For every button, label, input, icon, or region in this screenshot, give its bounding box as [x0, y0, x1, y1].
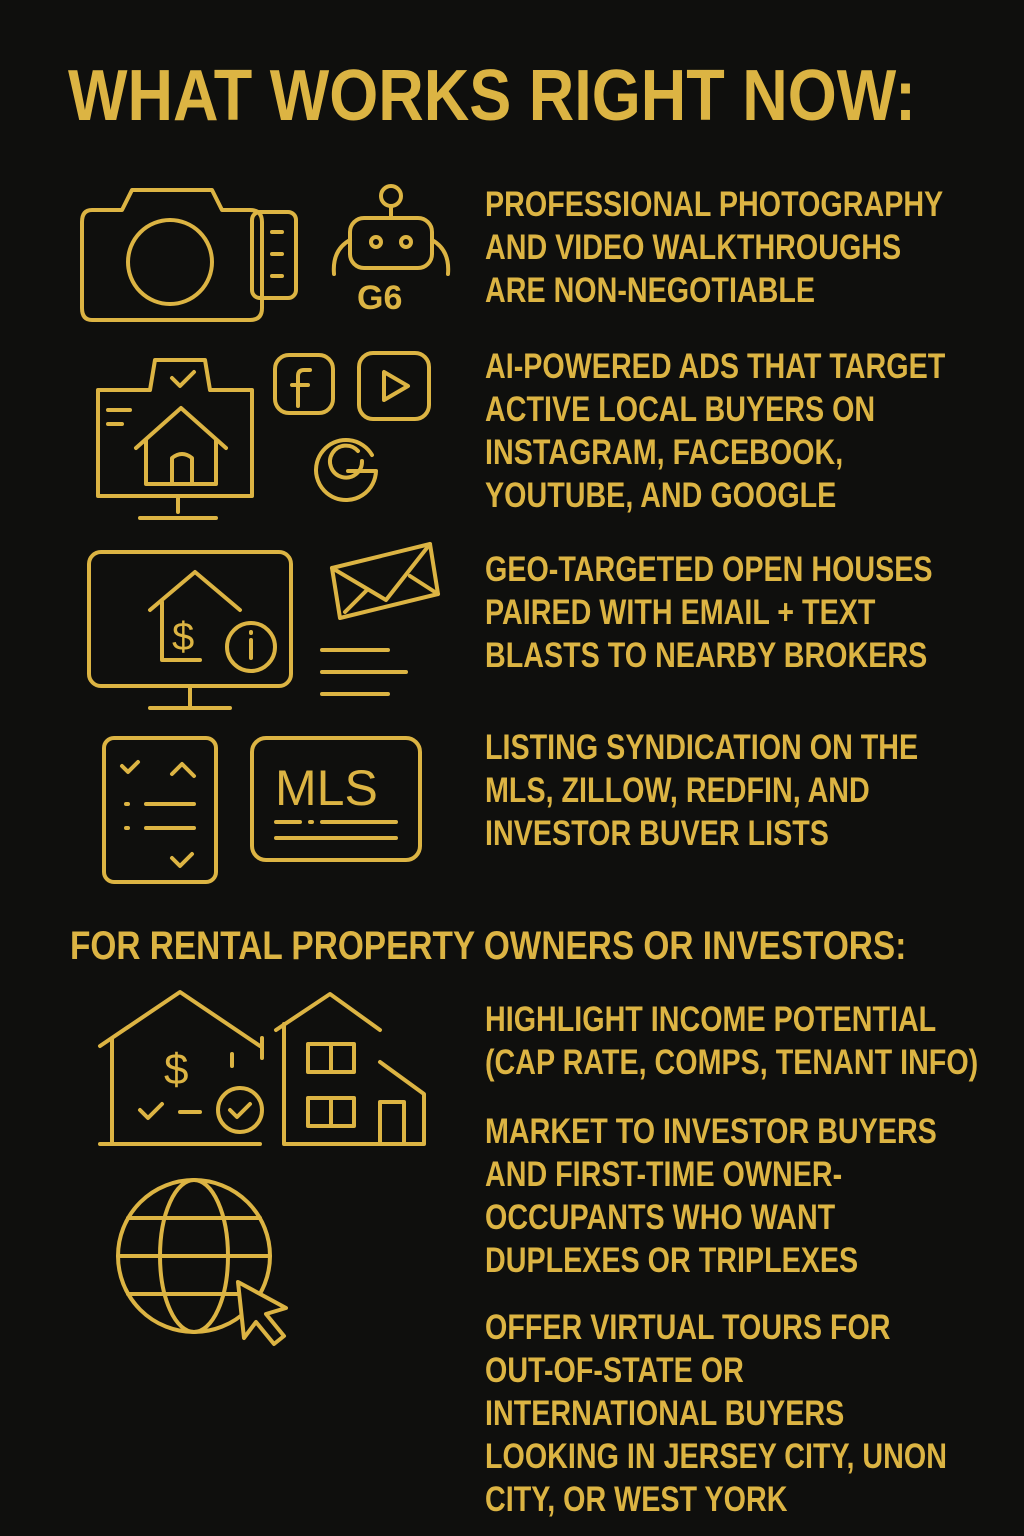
icon: robot: G6: [357, 279, 402, 317]
text: investor buyers: MARKET TO INVESTOR BUYERS: [485, 1112, 937, 1151]
text: syndication: [485, 728, 918, 853]
text: income: [485, 1000, 978, 1082]
icon: checklist: [104, 738, 216, 882]
text: investor buyers: DUPLEXES OR TRIPLEXES: [485, 1241, 858, 1280]
section heading: FOR RENTAL PROPERTY OWNERS OR INVESTORS:: [70, 924, 906, 968]
text: open houses: GEO-TARGETED OPEN HOUSES: [485, 550, 933, 589]
text: virtual tours: CITY, OR WEST YORK: [485, 1480, 787, 1519]
text: investor buyers: OCCUPANTS WHO WANT: [485, 1198, 835, 1237]
text: photography: PROFESSIONAL PHOTOGRAPHY: [485, 185, 943, 224]
icon: MLS card: MLS: [275, 760, 378, 816]
text: ai ads: AI-POWERED ADS THAT TARGET: [485, 347, 945, 386]
text: income: HIGHLIGHT INCOME POTENTIAL: [485, 1000, 936, 1039]
text: ai ads: [485, 347, 945, 515]
icon: duplex house: [276, 994, 424, 1144]
text: ai ads: YOUTUBE, AND GOOGLE: [485, 476, 836, 515]
text: virtual tours: LOOKING IN JERSEY CITY, UNON: [485, 1437, 947, 1476]
text: syndication: INVESTOR BUVER LISTS: [485, 814, 829, 853]
icon: house dollar: [100, 992, 262, 1144]
icons: social: [275, 353, 429, 500]
text: investor buyers: AND FIRST-TIME OWNER-: [485, 1155, 842, 1194]
icon: MLS card: [252, 738, 420, 860]
icon: envelope: [322, 544, 438, 694]
text: open houses: PAIRED WITH EMAIL + TEXT: [485, 593, 875, 632]
text: investor buyers: [485, 1112, 937, 1280]
icon: globe cursor: [118, 1180, 286, 1344]
text: photography: [485, 185, 943, 310]
text: open houses: BLASTS TO NEARBY BROKERS: [485, 636, 927, 675]
text: ai ads: INSTAGRAM, FACEBOOK,: [485, 433, 843, 472]
text: ai ads: ACTIVE LOCAL BUYERS ON: [485, 390, 875, 429]
icon: house dollar: $: [164, 1045, 188, 1094]
text: virtual tours: OUT-OF-STATE OR: [485, 1351, 744, 1390]
text: syndication: LISTING SYNDICATION ON THE: [485, 728, 918, 767]
title: WHAT WORKS RIGHT NOW:: [68, 56, 916, 136]
text: photography: AND VIDEO WALKTHROUGHS: [485, 228, 901, 267]
text: photography: ARE NON-NEGOTIABLE: [485, 271, 815, 310]
text: virtual tours: OFFER VIRTUAL TOURS FOR: [485, 1308, 891, 1347]
text: virtual tours: [485, 1308, 947, 1519]
icon: monitor dollar: $: [172, 615, 194, 659]
icon: monitor dollar: [89, 552, 291, 708]
text: income: (CAP RATE, COMPS, TENANT INFO): [485, 1043, 978, 1082]
icon: monitor house: [98, 360, 252, 518]
text: virtual tours: INTERNATIONAL BUYERS: [485, 1394, 844, 1433]
icon: robot: [334, 186, 448, 317]
text: syndication: MLS, ZILLOW, REDFIN, AND: [485, 771, 870, 810]
icon: camera: [82, 190, 296, 320]
text: open houses: [485, 550, 933, 675]
